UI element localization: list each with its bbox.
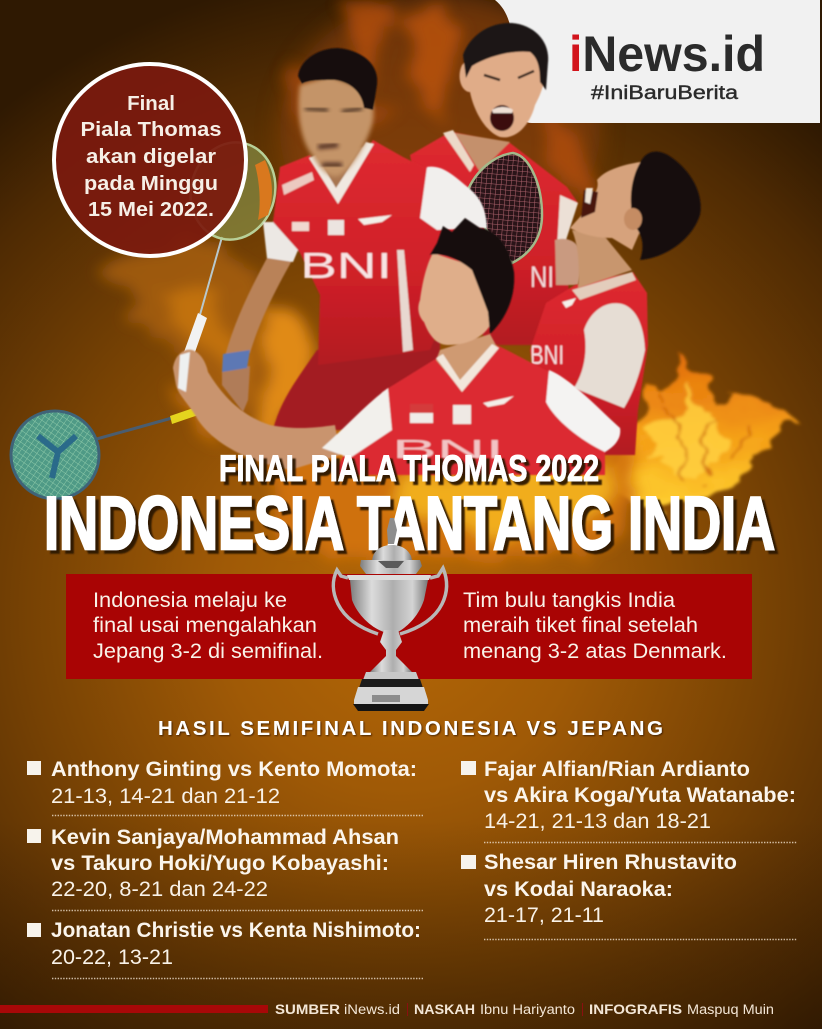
icon: Thomas Cup trophy	[333, 518, 447, 711]
racket: centre	[467, 153, 542, 263]
text: India	[463, 588, 727, 663]
text: Indonesia: Jepang 3-2 di semifinal.	[93, 639, 323, 663]
mouth	[581, 190, 598, 218]
results: right column	[461, 758, 797, 940]
result: Sanjaya/Ahsan vs Hoki/Kobayashi: vs Takuro Hoki/Yugo Kobayashi:	[51, 852, 389, 875]
flames behind players	[105, 0, 800, 559]
result: Sanjaya/Ahsan vs Hoki/Kobayashi: Kevin Sanjaya/Mohammad Ahsan	[51, 826, 399, 849]
player: right: BNI	[530, 340, 564, 370]
left arm	[225, 250, 298, 356]
left sleeve	[263, 222, 298, 262]
footer credits: SUMBER	[275, 1002, 340, 1017]
results: left column	[27, 758, 423, 978]
arm and hand	[173, 350, 340, 470]
result: Christie vs Nishimoto	[27, 919, 423, 978]
neck	[310, 145, 370, 190]
player: top centre: NI	[530, 261, 554, 294]
logo panel	[495, 0, 820, 123]
jersey	[530, 272, 648, 455]
footer credits: iNews.id	[344, 1002, 400, 1017]
title: small: FINAL PIALA THOMAS 2022	[219, 448, 599, 489]
right sleeve	[420, 167, 487, 230]
shorts	[273, 340, 440, 430]
collar	[309, 142, 374, 204]
result: Rhustavito vs Naraoka: Shesar Hiren Rhustavito	[484, 851, 737, 874]
jersey	[410, 132, 578, 345]
tagline: #IniBaruBerita	[591, 83, 739, 104]
result: Alfian/Ardianto vs Koga/Watanabe	[461, 758, 797, 842]
flags and logo	[410, 404, 433, 413]
player: left: BNI	[300, 245, 392, 286]
right sleeve	[546, 370, 620, 452]
player: front: BNI	[392, 434, 504, 464]
hair	[463, 23, 548, 90]
stem	[370, 630, 412, 672]
mouth	[490, 105, 514, 131]
text: Indonesia	[93, 588, 323, 663]
text: Indonesia: final usai mengalahkan	[93, 613, 317, 637]
callout: final date: 15 Mei 2022.	[88, 198, 214, 221]
player: left	[222, 48, 487, 430]
jersey	[273, 140, 455, 365]
result: Christie vs Nishimoto: Jonatan Christie vs Kenta Nishimoto:	[51, 919, 421, 942]
ear	[624, 208, 642, 230]
wristband	[222, 350, 250, 372]
player: front	[173, 218, 620, 475]
hair	[631, 152, 701, 260]
heading: semifinal results: HASIL SEMIFINAL INDONESIA VS JEPANG	[158, 717, 663, 740]
base	[359, 679, 423, 688]
result: Rhustavito vs Naraoka	[461, 851, 797, 940]
result: Christie vs Nishimoto: 20-22, 13-21	[51, 945, 173, 969]
racket: left player	[180, 133, 286, 355]
neck and face	[455, 133, 510, 172]
player: right	[530, 152, 701, 455]
result: Ginting vs Momota: Anthony Ginting vs Kento Momota:	[51, 758, 417, 781]
text: India: Tim bulu tangkis India	[463, 588, 675, 612]
footer credits	[0, 1002, 774, 1017]
jersey	[335, 345, 605, 475]
brows and eyes	[484, 71, 534, 80]
text: Indonesia: Indonesia melaju ke	[93, 588, 287, 612]
sleeve	[574, 303, 645, 408]
lid	[372, 545, 412, 560]
result: Ginting vs Momota: 21-13, 14-21 dan 21-12	[51, 784, 280, 808]
callout: final date: pada Minggu	[84, 172, 218, 195]
collar	[572, 272, 636, 300]
handles	[333, 570, 378, 634]
callout: final date	[54, 64, 246, 256]
result: Rhustavito vs Naraoka: vs Kodai Naraoka:	[484, 878, 673, 901]
finial	[387, 518, 397, 544]
left sleeve	[322, 388, 392, 458]
face	[570, 162, 645, 250]
result: Alfian/Ardianto vs Koga/Watanabe: Fajar Alfian/Rian Ardianto	[484, 758, 750, 781]
footer credits: INFOGRAFIS	[589, 1002, 682, 1017]
text: India: meraih tiket final setelah	[463, 613, 698, 637]
callout: final date: Final	[127, 92, 175, 115]
result: Alfian/Ardianto vs Koga/Watanabe: vs Akira Koga/Yuta Watanabe:	[484, 784, 796, 807]
footer credits: Maspuq Muin	[687, 1002, 774, 1017]
face	[298, 76, 374, 176]
hair	[298, 48, 377, 110]
hair	[430, 218, 514, 334]
face	[418, 253, 496, 345]
result: Alfian/Ardianto vs Koga/Watanabe: 14-21, 21-13 dan 18-21	[484, 809, 711, 833]
player: top centre	[410, 23, 583, 345]
callout: final date: akan digelar	[86, 145, 216, 168]
collar	[436, 344, 499, 392]
text: India: menang 3-2 atas Denmark.	[463, 639, 727, 663]
footer credits: Ibnu Hariyanto	[480, 1002, 575, 1017]
callout: final date: Piala Thomas	[80, 118, 222, 141]
result: Rhustavito vs Naraoka: 21-17, 21-11	[484, 903, 604, 927]
result: Sanjaya/Ahsan vs Hoki/Kobayashi: 22-20, 8-21 dan 24-22	[51, 877, 268, 901]
rim	[347, 575, 431, 580]
neck	[572, 230, 632, 288]
racket: bottom left	[11, 403, 210, 499]
neck	[436, 334, 497, 388]
result: Sanjaya/Ahsan vs Hoki/Kobayashi	[27, 826, 423, 910]
panel: red summary	[66, 574, 752, 679]
footer credits: NASKAH	[414, 1002, 475, 1017]
cup	[350, 580, 428, 632]
result: Ginting vs Momota	[27, 758, 423, 816]
logo wordmark: iNews.id	[569, 26, 765, 82]
